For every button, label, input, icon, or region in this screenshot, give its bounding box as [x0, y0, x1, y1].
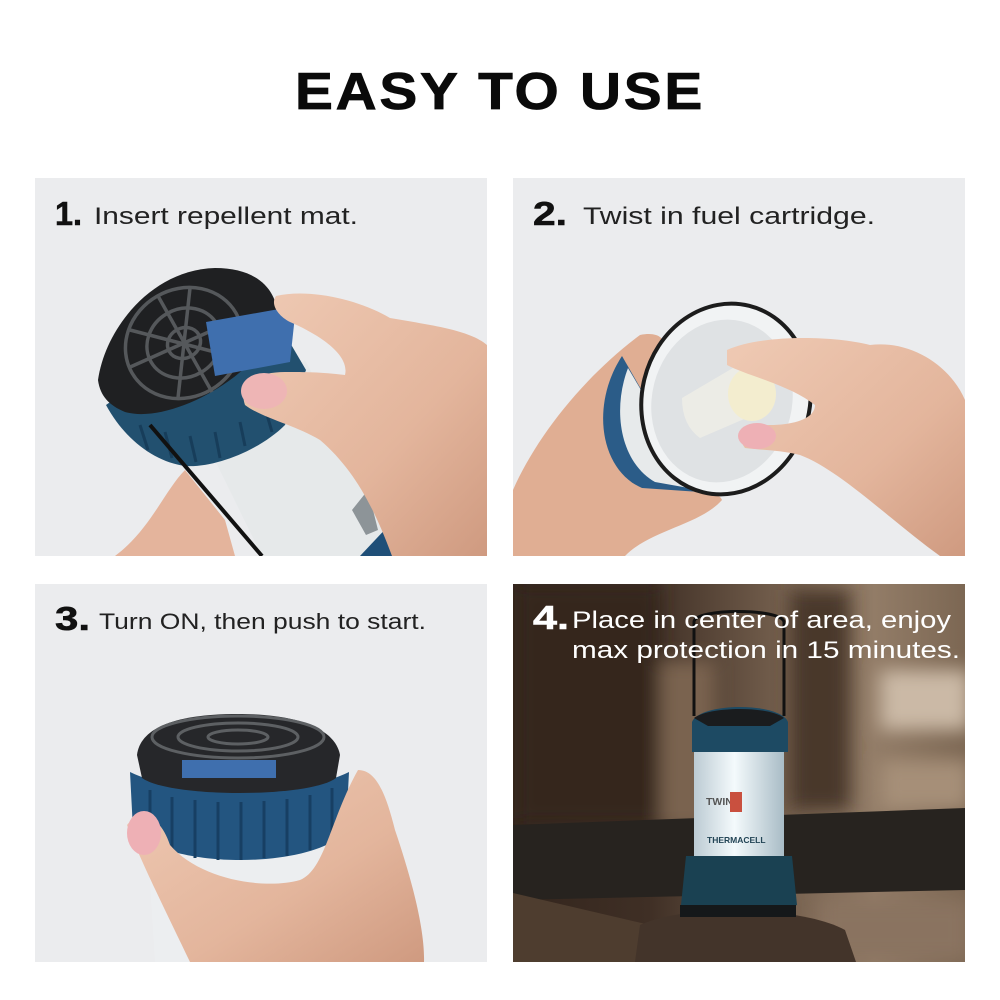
stump	[513, 893, 650, 962]
illustration: blue collar	[130, 772, 349, 860]
lantern logo: Thermacell: THERMACELL	[707, 835, 766, 845]
illustration: pink nail	[241, 373, 287, 409]
step 2 label: Twist in fuel cartridge.	[583, 203, 875, 230]
illustration: fuel cartridge	[682, 365, 776, 438]
illustration: blue repellent mat	[206, 306, 296, 376]
illustration: hand behind lantern	[115, 470, 235, 556]
step 4 label	[572, 607, 960, 664]
step 2 number: 2.	[533, 195, 567, 232]
panel: step 2	[513, 178, 965, 556]
panel: step 1	[35, 178, 487, 556]
illustration: lantern base	[603, 356, 700, 492]
illustration: lantern open end	[639, 302, 812, 496]
step 4 label: Place in center of area, enjoy	[572, 607, 952, 634]
step 4 label: max protection in 15 minutes.	[572, 637, 960, 664]
illustration: lantern	[680, 612, 797, 917]
illustration: left hand	[513, 334, 722, 556]
step 3 number: 3.	[55, 600, 90, 637]
lantern logo: brand mark	[730, 792, 742, 812]
title: EASY TO USE	[295, 63, 705, 121]
step 1 number: 1.	[55, 195, 82, 232]
illustration: hand	[243, 293, 487, 556]
panel: step 3	[35, 584, 487, 962]
step 4 number: 4.	[533, 599, 569, 636]
fence rail	[513, 808, 965, 900]
illustration: pink nail	[127, 811, 161, 855]
illustration: lantern body	[98, 266, 422, 556]
illustration: black top	[137, 714, 340, 793]
illustration: lantern body	[148, 850, 335, 962]
illustration: right hand	[727, 338, 965, 556]
illustration: blue mat	[182, 760, 276, 778]
illustration: pink nail	[738, 423, 776, 449]
panel: step 4 photo	[513, 584, 970, 962]
lantern logo: Twin Metals: TWIN	[706, 796, 733, 808]
step 3 label: Turn ON, then push to start.	[99, 609, 426, 634]
step 1 label: Insert repellent mat.	[94, 203, 358, 230]
illustration: hand	[127, 770, 424, 962]
